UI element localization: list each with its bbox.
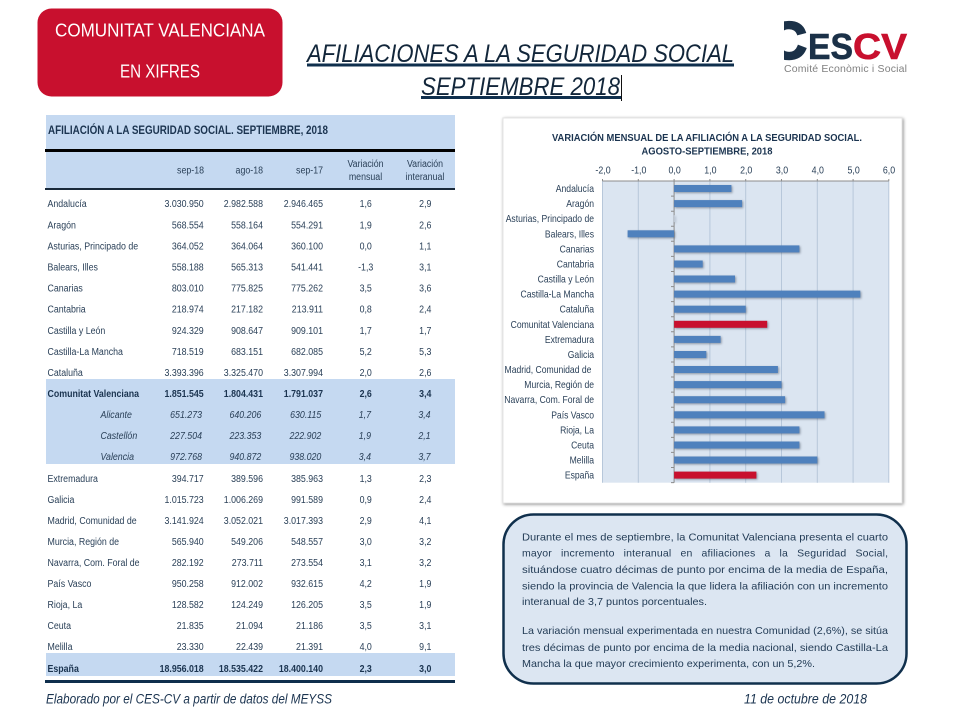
table header row: interanual [406, 171, 444, 183]
column: region names [48, 199, 140, 675]
logo: CES-CV: Comité Econòmic i Social [784, 63, 907, 75]
column: ago-18: 364.064 [231, 241, 264, 253]
column: region names: Asturias, Principado de [48, 241, 138, 253]
column: sep-18: 23.330 [177, 642, 204, 653]
callout: commentary: interanual de 3,7 puntos porcentuales. [522, 596, 707, 608]
column: region names: Galicia [48, 495, 75, 506]
province names [100, 410, 137, 463]
column: ago-18: 124.249 [231, 600, 263, 611]
logo: CES-CV: C [769, 12, 807, 70]
column: sep-17 [279, 199, 324, 675]
column: variación interanual: 3,6 [419, 283, 431, 295]
panel: data table [45, 115, 455, 683]
logo: CES-CV: CV [853, 26, 907, 67]
column: variación interanual: 2,1 [417, 431, 431, 442]
top value axis: 3,0 [776, 165, 789, 177]
column: region names: Aragón [48, 220, 76, 232]
column: sep-18: 282.192 [172, 558, 204, 569]
column: ago-18: 565.313 [231, 262, 263, 274]
column: sep-18: 3.141.924 [164, 516, 204, 527]
column: sep-17: 554.291 [291, 220, 323, 232]
table header row: sep-17 [296, 165, 323, 177]
column: region names: Cantabria [48, 304, 86, 316]
column: variación interanual: 2,9 [419, 199, 431, 210]
logo: CES-CV [784, 20, 908, 72]
callout: commentary: mayor incremento interanual en afiliaciones a la Seguridad Social, [522, 548, 888, 560]
column: variación mensual: 1,3 [360, 474, 372, 485]
column: ago-18: 640.206 [229, 410, 262, 421]
top value axis: 2,0 [740, 165, 753, 177]
column: sep-18: 924.329 [172, 325, 204, 337]
column: variación interanual: 3,1 [419, 262, 431, 274]
callout: commentary [504, 514, 906, 684]
column: variación mensual: 4,0 [360, 642, 372, 653]
column: sep-18: 128.582 [172, 600, 204, 611]
column: sep-17: 21.391 [296, 642, 323, 653]
column: variación mensual: 2,3 [360, 664, 372, 675]
province names: Alicante [100, 410, 132, 421]
column: ago-18: 18.535.422 [219, 664, 263, 675]
column: variación mensual: 0,0 [360, 241, 372, 253]
chart title: VARIACIÓN MENSUAL DE LA AFILIACIÓN A LA SEGURIDAD SOCIAL. [552, 131, 862, 144]
column: sep-18: 18.956.018 [160, 664, 204, 675]
column: variación mensual: 1,7 [360, 325, 372, 337]
column: sep-18: 21.835 [177, 621, 204, 632]
column: sep-18: 568.554 [172, 220, 204, 232]
column: sep-17: 126.205 [291, 600, 323, 611]
top value axis: 0,0 [668, 165, 681, 177]
column: variación interanual [417, 199, 432, 675]
column: sep-18: 558.188 [172, 262, 204, 274]
callout: commentary: Mancha la que mayor crecimiento experimenta, con un 5,2%. [522, 658, 815, 670]
column: sep-18 [160, 199, 204, 675]
table header row: Variación [407, 158, 443, 170]
category labels: Galicia [568, 349, 595, 360]
province names: Valencia [100, 452, 135, 463]
category labels: Murcia, Región de [524, 380, 594, 390]
category labels: Extremadura [545, 334, 595, 345]
red badge: Comunitat Valenciana en xifres: EN XIFRES [120, 62, 200, 82]
column: sep-17: 273.554 [291, 558, 324, 569]
highlight band: España [46, 653, 455, 676]
column: variación interanual: 2,6 [419, 367, 431, 379]
column: variación interanual: 5,3 [419, 346, 431, 358]
column: sep-17: 932.615 [291, 579, 323, 590]
column: ago-18: 389.596 [231, 474, 263, 485]
province names: Castellón [100, 431, 137, 442]
column: ago-18: 775.825 [231, 283, 263, 295]
column: ago-18: 908.647 [231, 325, 263, 337]
column: variación mensual: -1,3 [358, 262, 373, 274]
column: variación mensual: 3,5 [360, 283, 372, 295]
column: ago-18: 683.151 [231, 346, 263, 358]
column: sep-18: 565.940 [172, 537, 204, 548]
top value axis [595, 165, 896, 181]
category labels: Cantabria [557, 259, 595, 270]
column: variación interanual: 3,2 [419, 558, 431, 569]
logo: CES-CV: ES [808, 26, 853, 67]
column: ago-18: 558.164 [231, 220, 264, 232]
plot area and gridlines [602, 181, 889, 483]
category labels: Castilla-La Mancha [520, 289, 595, 300]
column: ago-18 [219, 199, 264, 675]
column: region names: Navarra, Com. Foral de [48, 558, 140, 569]
column: variación interanual: 2,6 [419, 220, 431, 232]
column: region names: Canarias [48, 283, 83, 295]
column: region names: Ceuta [48, 621, 72, 632]
table header row [45, 149, 455, 190]
column: sep-17: 21.186 [296, 621, 323, 632]
column: variación mensual: 2,9 [360, 516, 372, 527]
column: sep-18: 227.504 [169, 431, 203, 442]
highlight band: Comunitat Valenciana [46, 379, 455, 464]
category labels: Ceuta [571, 440, 595, 451]
category axis [671, 181, 674, 483]
table header row: ago-18 [236, 165, 263, 177]
column: ago-18: 1.804.431 [224, 389, 264, 400]
column: variación mensual: 0,9 [360, 495, 372, 506]
main title [305, 40, 734, 101]
column: variación interanual: 3,1 [419, 621, 431, 632]
column: sep-17: 18.400.140 [279, 664, 323, 675]
bars [628, 185, 860, 479]
callout: commentary: La variación mensual experimentada en nuestra Comunidad (2,6%), se sitúa [522, 625, 888, 637]
category labels: Balears, Illes [545, 229, 594, 239]
column: sep-17: 385.963 [291, 474, 323, 485]
column: sep-17: 2.946.465 [284, 199, 323, 210]
column: variación interanual: 2,3 [419, 474, 431, 485]
column: variación mensual: 2,6 [360, 389, 372, 400]
column: ago-18: 21.094 [236, 621, 264, 632]
column: variación interanual: 2,4 [419, 495, 432, 506]
column: variación mensual: 1,9 [359, 431, 372, 442]
column: variación mensual: 3,0 [360, 537, 372, 548]
column: sep-18: 803.010 [172, 283, 204, 295]
category labels: Andalucía [556, 183, 595, 194]
column: sep-18: 3.393.396 [164, 367, 204, 379]
column: sep-17: 541.441 [291, 262, 323, 274]
column: ago-18: 1.006.269 [224, 495, 263, 506]
column: variación mensual: 1,6 [360, 199, 372, 210]
top value axis: 5,0 [847, 165, 860, 177]
column: variación interanual: 1,9 [419, 579, 431, 590]
footer: date: 11 de octubre de 2018 [744, 692, 867, 706]
callout: commentary: siendo la provincia de Valencia la que lidera la afiliación con un incremento [522, 580, 888, 592]
column: sep-17: 222.902 [289, 431, 322, 442]
category labels: Melilla [570, 455, 595, 466]
column: ago-18: 3.325.470 [224, 367, 264, 379]
category labels: Madrid, Comunidad de [505, 364, 591, 375]
column: region names: Rioja, La [48, 600, 83, 611]
column: region names: País Vasco [48, 579, 91, 590]
table header row: mensual [349, 171, 382, 183]
column: sep-18: 1.851.545 [164, 389, 204, 400]
column: variación mensual: 3,5 [360, 621, 372, 632]
column: ago-18: 549.206 [231, 537, 263, 548]
column: variación mensual: 1,7 [359, 410, 372, 421]
column: sep-17: 548.557 [291, 537, 323, 548]
column: sep-17: 909.101 [291, 325, 323, 337]
column: region names: Melilla [48, 642, 73, 653]
category labels: Canarias [560, 244, 594, 255]
red badge: Comunitat Valenciana en xifres [38, 8, 282, 96]
red badge: Comunitat Valenciana en xifres: COMUNITAT VALENCIANA [55, 20, 265, 40]
column: ago-18: 912.002 [231, 579, 263, 590]
column: region names: Murcia, Región de [48, 537, 119, 548]
column: region names: Castilla-La Mancha [48, 346, 123, 358]
category labels: Castilla y León [538, 274, 594, 285]
table title band [46, 115, 455, 150]
column: variación interanual: 1,9 [419, 600, 431, 611]
column: ago-18: 940.872 [229, 452, 262, 463]
callout: commentary: tres décimas de punto por encima de la media nacional, siendo Castilla-La [522, 642, 888, 654]
panel: bar chart [503, 118, 902, 503]
column: ago-18: 273.711 [232, 558, 263, 569]
category labels: Cataluña [560, 304, 595, 315]
callout: commentary: situándose cuatro décimas de punto por encima de la media de España, [522, 564, 888, 576]
column: variación interanual: 3,4 [418, 410, 431, 421]
category labels: País Vasco [551, 410, 594, 420]
chart title [552, 131, 862, 158]
column: sep-18: 394.717 [172, 474, 204, 485]
chart title: AGOSTO-SEPTIEMBRE, 2018 [642, 146, 773, 158]
column: region names: Cataluña [48, 367, 83, 379]
column: region names: España [48, 664, 79, 675]
column: sep-17: 213.911 [292, 304, 323, 316]
column: variación mensual: 0,8 [360, 304, 372, 316]
column: region names: Madrid, Comunidad de [48, 516, 137, 527]
column: sep-18: 972.768 [170, 452, 203, 463]
column: ago-18: 223.353 [229, 431, 262, 442]
category labels [504, 183, 595, 481]
column: sep-18: 218.974 [172, 304, 204, 316]
column: variación mensual: 4,2 [360, 579, 372, 590]
column: region names: Andalucía [48, 199, 87, 210]
column: variación mensual: 5,2 [360, 346, 372, 358]
column: sep-17: 630.115 [290, 410, 322, 421]
column: variación interanual: 3,4 [419, 389, 432, 400]
category labels: Asturias, Principado de [506, 214, 594, 224]
top value axis: 4,0 [812, 165, 824, 177]
footer: source note: Elaborado por el CES-CV a partir de datos del MEYSS [46, 692, 332, 706]
main title: SEPTIEMBRE 2018 [421, 73, 620, 101]
column: sep-17: 360.100 [291, 241, 324, 253]
column: sep-18: 3.030.950 [164, 199, 204, 210]
category labels: Rioja, La [560, 425, 595, 436]
column: region names: Comunitat Valenciana [48, 389, 140, 400]
top value axis: 6,0 [883, 165, 896, 177]
column: variación interanual: 3,0 [419, 664, 431, 675]
column: variación mensual: 3,5 [360, 600, 372, 611]
column: ago-18: 3.052.021 [224, 516, 263, 527]
column: region names: Castilla y León [48, 325, 105, 337]
table header row: sep-18 [177, 165, 204, 177]
top value axis: -2,0 [595, 165, 611, 177]
column: variación mensual: 2,0 [360, 367, 372, 379]
top value axis: -1,0 [631, 165, 647, 177]
column: sep-18: 718.519 [172, 346, 204, 358]
column: sep-17: 682.085 [291, 346, 323, 358]
column: ago-18: 2.982.588 [224, 199, 263, 210]
column: variación interanual: 1,1 [419, 241, 431, 253]
column: sep-18: 651.273 [170, 410, 203, 421]
column: sep-17: 3.307.994 [284, 367, 324, 379]
column: sep-17: 775.262 [291, 283, 323, 295]
column: variación mensual: 3,4 [359, 452, 372, 463]
column: sep-17: 991.589 [291, 495, 323, 506]
table title band: AFILIACIÓN A LA SEGURIDAD SOCIAL. SEPTIEMBRE, 2018 [48, 124, 329, 137]
column: variación mensual: 3,1 [360, 558, 372, 569]
column: variación interanual: 4,1 [419, 516, 431, 527]
table header row: Variación [347, 158, 384, 170]
column: ago-18: 22.439 [236, 642, 263, 653]
category labels: Comunitat Valenciana [511, 319, 595, 330]
column: sep-17: 3.017.393 [284, 516, 323, 527]
column: variación interanual: 2,4 [419, 304, 432, 316]
callout: commentary: Durante el mes de septiembre, la Comunitat Valenciana presenta el cuarto [522, 532, 888, 544]
column: variación mensual [358, 199, 373, 675]
column: sep-17: 1.791.037 [284, 389, 323, 400]
column: variación interanual: 3,2 [419, 537, 431, 548]
column: sep-17: 938.020 [289, 452, 322, 463]
column: region names: Balears, Illes [48, 262, 98, 274]
column: region names: Extremadura [48, 474, 99, 485]
category labels: Navarra, Com. Foral de [504, 395, 594, 405]
column: sep-18: 950.258 [172, 579, 204, 590]
column: variación interanual: 9,1 [419, 642, 431, 653]
category labels: España [565, 470, 595, 481]
column: variación interanual: 3,7 [418, 452, 431, 463]
column: ago-18: 217.182 [231, 304, 263, 316]
main title: AFILIACIONES A LA SEGURIDAD SOCIAL [305, 40, 734, 68]
column: variación mensual: 1,9 [360, 220, 372, 232]
top value axis: 1,0 [704, 165, 717, 177]
column: sep-18: 364.052 [172, 241, 204, 253]
column: variación interanual: 1,7 [419, 325, 431, 337]
category labels: Aragón [566, 199, 594, 209]
column: sep-18: 1.015.723 [164, 495, 204, 506]
